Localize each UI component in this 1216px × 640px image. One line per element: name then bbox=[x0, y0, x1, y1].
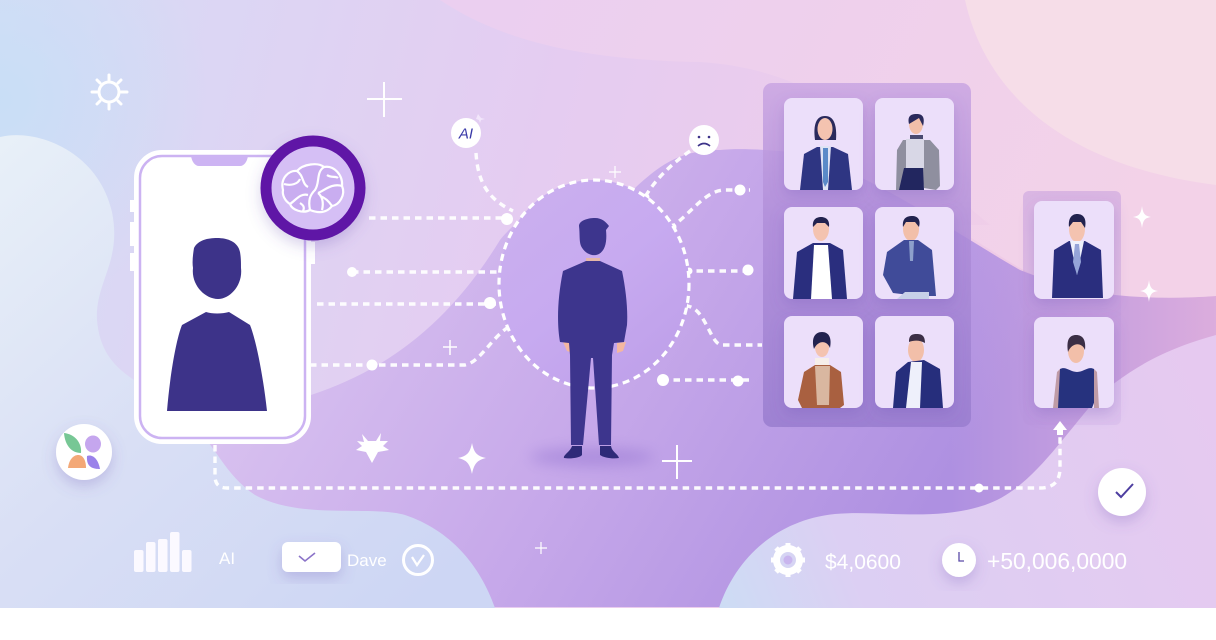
icon: tiny sparkle bottom bbox=[535, 542, 547, 554]
card 3: man in navy blazer bbox=[784, 207, 863, 299]
label: Dave: Dave bbox=[347, 551, 387, 570]
panel: candidate grid bbox=[763, 83, 971, 427]
icon: sparkle plus lower bbox=[662, 445, 692, 479]
panel: shortlisted candidates bbox=[1023, 191, 1121, 425]
icon: check bubble bbox=[1098, 468, 1146, 516]
icon: small sparkle left bbox=[443, 340, 457, 355]
icon: sparkle right 1 bbox=[1133, 206, 1151, 228]
label: AI: AI bbox=[219, 549, 235, 568]
icon: sun bbox=[92, 75, 127, 109]
shortlist card 2: woman in navy dress bbox=[1034, 317, 1114, 408]
icon: sad face bubble bbox=[689, 125, 719, 155]
total text: +50,006,0000 bbox=[987, 548, 1127, 574]
icon: crown sparkle bbox=[356, 433, 389, 463]
icon: colourful leaves badge bbox=[56, 424, 112, 480]
central person figure bbox=[530, 218, 654, 466]
icon: small sparkle near circle bbox=[609, 166, 621, 178]
button with check bbox=[282, 542, 341, 572]
central circle bbox=[499, 180, 689, 388]
icon: AI bubble bbox=[451, 114, 485, 148]
connector lines bbox=[215, 151, 1060, 488]
icon: arrow into shortlist bbox=[1053, 421, 1067, 435]
shortlist card 1: man in suit and tie bbox=[1034, 201, 1114, 299]
profile silhouette bbox=[167, 238, 267, 411]
connector nodes bbox=[347, 184, 984, 492]
phone mockup bbox=[130, 152, 315, 442]
icon: clock bbox=[942, 543, 976, 577]
brain badge bbox=[266, 141, 360, 235]
phone notch bbox=[191, 156, 248, 166]
card 4: man in blue jacket bbox=[875, 207, 954, 299]
phone side buttons bbox=[130, 200, 315, 271]
icon: sparkle right 2 bbox=[1140, 280, 1158, 302]
amount text: $4,0600 bbox=[825, 551, 901, 574]
bar chart icon bbox=[134, 532, 192, 572]
icon: gear bbox=[771, 543, 805, 577]
card 6: man in navy blazer and white shirt bbox=[875, 316, 954, 408]
card 1: woman in navy suit bbox=[784, 98, 863, 190]
icon: AI bubble: AI bbox=[458, 126, 473, 142]
card 5: person in brown jacket bbox=[784, 316, 863, 408]
white footer band bbox=[0, 608, 1216, 640]
card 2: person in grey cardigan bbox=[875, 98, 954, 190]
icon: four-point star bbox=[458, 443, 486, 474]
icon: sparkle plus top bbox=[367, 82, 402, 117]
icon: circled check bbox=[404, 546, 432, 574]
icon: brain bbox=[282, 164, 343, 212]
